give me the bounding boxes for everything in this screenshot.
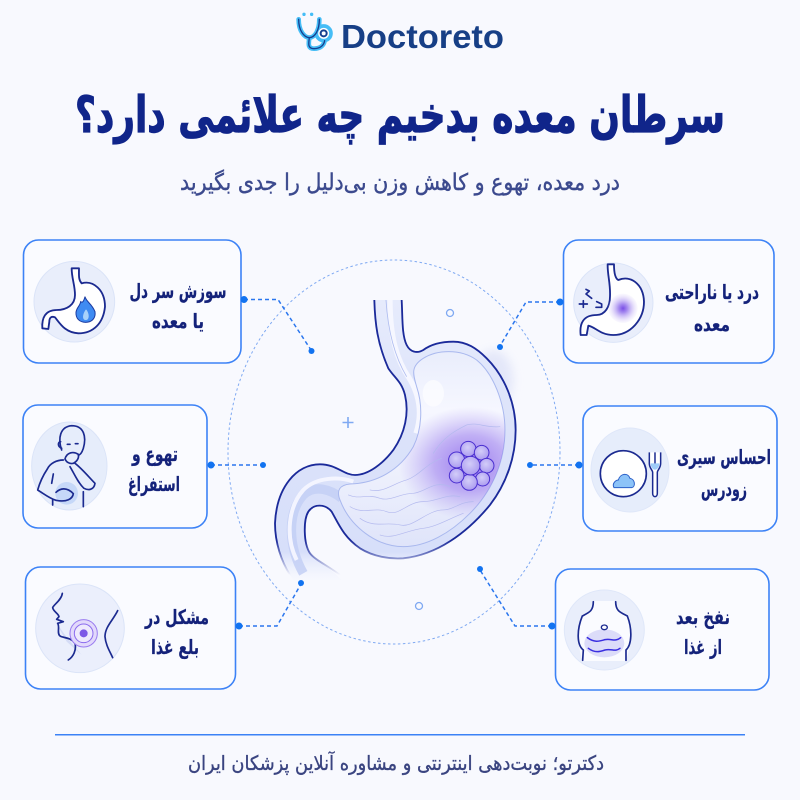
soft shadow <box>473 350 513 410</box>
label <box>665 280 759 336</box>
label <box>128 442 180 496</box>
footer text: دکترتو؛ نوبت‌دهی اینترنتی و مشاوره آنلاین پزشکان ایران <box>188 750 604 776</box>
icon: plate and fork <box>591 428 669 512</box>
panel: stomach pain <box>556 240 774 363</box>
label: مشکل در <box>144 605 209 629</box>
label: تهوع و <box>131 442 178 466</box>
panel: bloating <box>548 569 769 690</box>
logo <box>299 13 504 55</box>
label <box>676 605 730 659</box>
icon: bloated abdomen <box>564 590 644 670</box>
stomach chamber <box>338 352 505 547</box>
label <box>130 279 226 333</box>
esophagus inner band <box>390 300 419 433</box>
label <box>677 445 771 501</box>
label: زودرس <box>701 477 747 501</box>
panel: swallowing difficulty <box>26 567 242 689</box>
subtitle: درد معده، تهوع و کاهش وزن بی‌دلیل را جدی بگیرید <box>180 169 620 196</box>
connector: early satiety <box>527 462 579 468</box>
purple inflammation <box>404 380 505 515</box>
stomach folds <box>348 424 500 536</box>
icon: nauseous person <box>32 422 107 510</box>
connector: heartburn <box>244 300 314 354</box>
connector: bloating <box>477 566 552 626</box>
stomach outline <box>275 300 407 575</box>
panel: heartburn <box>24 240 248 363</box>
label: درد یا ناراحتی <box>665 280 759 304</box>
panel: nausea <box>23 405 214 528</box>
stomach body <box>275 300 516 580</box>
decoration: small circle bottom <box>416 602 422 610</box>
label: یا معده <box>152 309 204 333</box>
label: استفراغ <box>128 472 180 496</box>
label: سوزش سر دل <box>130 279 226 303</box>
connector: pain <box>497 302 560 350</box>
decoration: plus <box>342 417 354 428</box>
panel: early satiety <box>576 406 777 531</box>
stomach illustration <box>274 300 517 576</box>
decoration: small circle top <box>446 310 454 316</box>
label: معده <box>694 312 730 336</box>
tumor cluster <box>449 441 494 490</box>
icon: throat <box>36 584 124 673</box>
icon: stomach with flame <box>34 261 115 342</box>
label: از غذا <box>684 635 722 659</box>
connector: swallowing <box>239 580 304 626</box>
footer rule <box>55 734 745 736</box>
dashed orbit ring <box>228 260 560 644</box>
connector: nausea <box>211 462 266 468</box>
label: نفخ بعد <box>676 605 730 629</box>
label: بلع غذا <box>151 635 199 659</box>
label <box>144 605 209 659</box>
duodenum inner band <box>291 489 342 573</box>
brand name: Doctoreto <box>341 18 504 55</box>
icon: stethoscope logo <box>299 13 331 49</box>
icon: stomach with pain <box>574 263 653 342</box>
